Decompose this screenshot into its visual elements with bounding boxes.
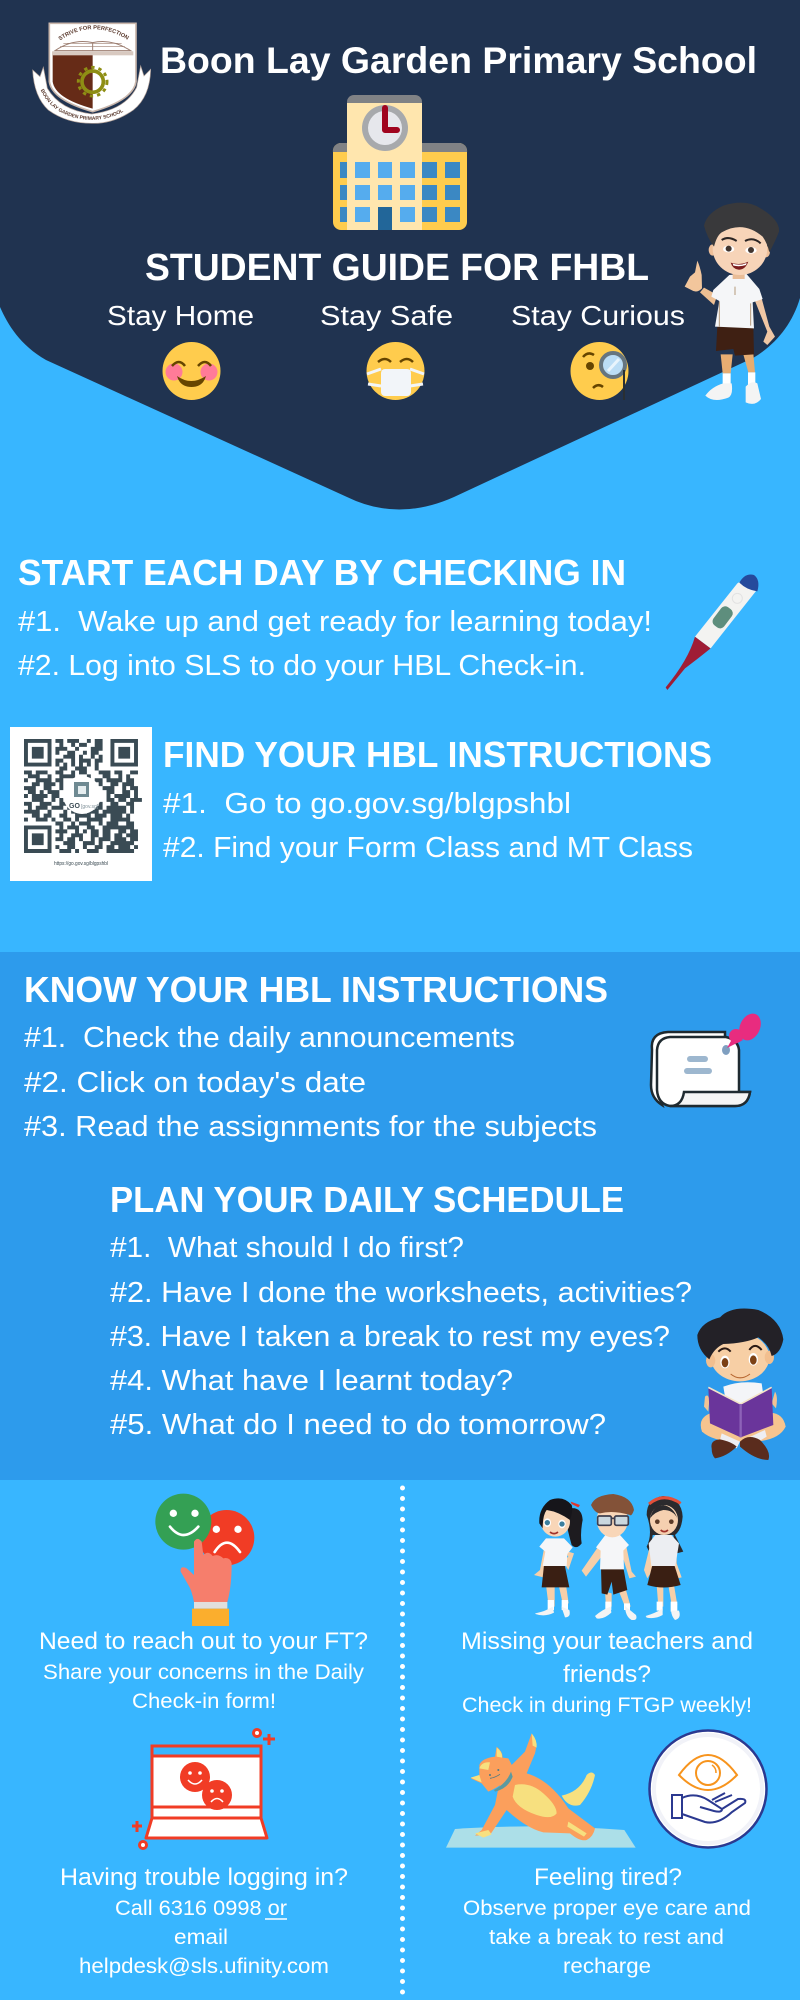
panel: help section [39,1488,766,1996]
divider dots [400,1488,405,1996]
icon: school crest: BOON LAY GARDEN PRIMARY SCHOOL [40,88,124,120]
text: stay safe: Stay Safe [320,300,453,331]
text: trouble logging in: email [174,1925,228,1949]
QR code card: GO [69,803,80,810]
text: stay curious: Stay Curious [511,300,685,331]
panel: darker instructions band [0,952,800,1480]
step 2: #2. Click on today's date [24,1067,366,1099]
step 1: #1. Check the daily announcements [24,1022,515,1054]
text: feeling tired: Feeling tired? [534,1864,682,1891]
illustration: boy reading a book [697,1309,786,1460]
QR code card [10,727,152,881]
step 3: #3. Read the assignments for the subjects [24,1111,597,1143]
question 2: #2. Have I done the worksheets, activities? [110,1277,692,1309]
icon: school crest: STRIVE FOR PERFECTION [58,25,130,40]
panel: start each day [18,552,758,690]
icon: thermometer [666,575,758,690]
question 5: #5. What do I need to do tomorrow? [110,1409,606,1441]
text: missing teachers and friends: Check in during FTGP weekly! [462,1693,752,1717]
QR code card: https://go.gov.sg/blgpshbl [54,861,108,867]
step 2: #2. Find your Form Class and MT Class [163,832,693,864]
text: stay home: Stay Home [107,300,254,331]
step 1: #1. Go to go.gov.sg/blgpshbl [163,788,571,820]
text: missing teachers and friends: friends? [563,1661,651,1688]
text: feeling tired: take a break to rest and [489,1925,724,1949]
heading: plan your daily schedule: PLAN YOUR DAILY SCHEDULE [110,1179,624,1220]
header background shape [0,0,800,510]
question 1: #1. What should I do first? [110,1232,464,1264]
step 2: #2. Log into SLS to do your HBL Check-in. [18,650,586,682]
text: feeling tired [463,1864,751,1978]
illustration: cat stretching on a mat [446,1733,636,1848]
text: trouble logging in: Having trouble logging in? [60,1864,348,1891]
QR code card: [gov.sg] [81,804,99,810]
text: trouble logging in: helpdesk@sls.ufinity.com [79,1954,329,1978]
heading: know your instructions: KNOW YOUR HBL INSTRUCTIONS [24,969,608,1010]
icon: mask emoji [366,342,424,400]
icon: monocle emoji [570,342,628,400]
heading: FIND YOUR HBL INSTRUCTIONS [163,734,712,775]
illustration: boy pointing up [685,203,779,404]
icon: school crest [32,22,151,124]
text: trouble logging in: Call 6316 0998 or [115,1896,287,1920]
icon: laptop with mood faces [132,1730,275,1848]
illustration: three students [534,1494,683,1620]
band background [0,952,800,1480]
text: reach out to FT [39,1628,368,1713]
text: reach out to FT: Need to reach out to your FT? [39,1628,368,1655]
text: missing teachers and friends: Missing your teachers and [461,1628,753,1655]
icon: smiling emoji [162,342,220,400]
text: feeling tired: recharge [563,1954,651,1978]
text: reach out to FT: Check-in form! [132,1689,276,1713]
icon: school building [333,95,467,230]
icon: hand choosing mood face [155,1494,254,1626]
icon: pinned note [651,1010,765,1106]
question 4: #4. What have I learnt today? [110,1365,513,1397]
title: Boon Lay Garden Primary School [160,40,757,81]
text: missing teachers and friends [461,1628,753,1717]
icon: eye care in hand [650,1730,766,1848]
heading: START EACH DAY BY CHECKING IN [18,552,626,593]
step 1: #1. Wake up and get ready for learning today! [18,606,652,638]
text: feeling tired: Observe proper eye care and [463,1896,751,1920]
heading: student guide: STUDENT GUIDE FOR FHBL [145,247,649,289]
panel: header banner [0,0,800,510]
question 3: #3. Have I taken a break to rest my eyes? [110,1321,670,1353]
panel: find your instructions [10,727,712,881]
text: reach out to FT: Share your concerns in the Daily [43,1660,364,1684]
text: trouble logging in [60,1864,348,1978]
